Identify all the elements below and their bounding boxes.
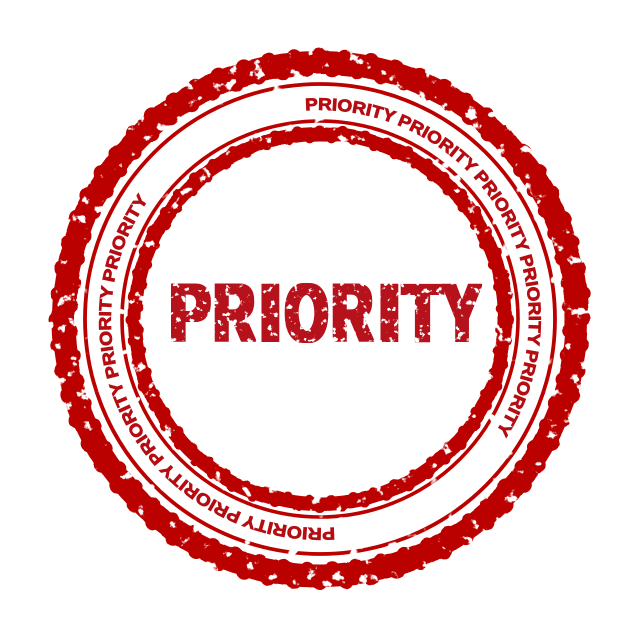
- outer scalloped ring: [57, 56, 583, 582]
- main heading: PRIORITY: T: [403, 266, 442, 359]
- main heading: PRIORITY: R: [214, 267, 254, 359]
- main heading: PRIORITY: I: [378, 268, 401, 359]
- inner scalloped ring: [132, 130, 508, 508]
- inner thin line ring: [122, 121, 518, 517]
- main heading: PRIORITY: R: [332, 267, 372, 359]
- main heading: PRIORITY: O: [286, 267, 328, 359]
- main heading: PRIORITY: Y: [444, 267, 480, 359]
- curved text: lower left: PRIORITY PRIORITY PRIORITY PRIORITY PRIORITY: [98, 192, 334, 540]
- main heading: PRIORITY: P: [170, 268, 210, 359]
- main heading: PRIORITY: I: [259, 268, 282, 359]
- curved text: upper right: PRIORITY PRIORITY PRIORITY PRIORITY PRIORITY: [306, 98, 542, 438]
- outer thin line ring: [85, 84, 555, 554]
- main heading: PRIORITY: [170, 266, 480, 359]
